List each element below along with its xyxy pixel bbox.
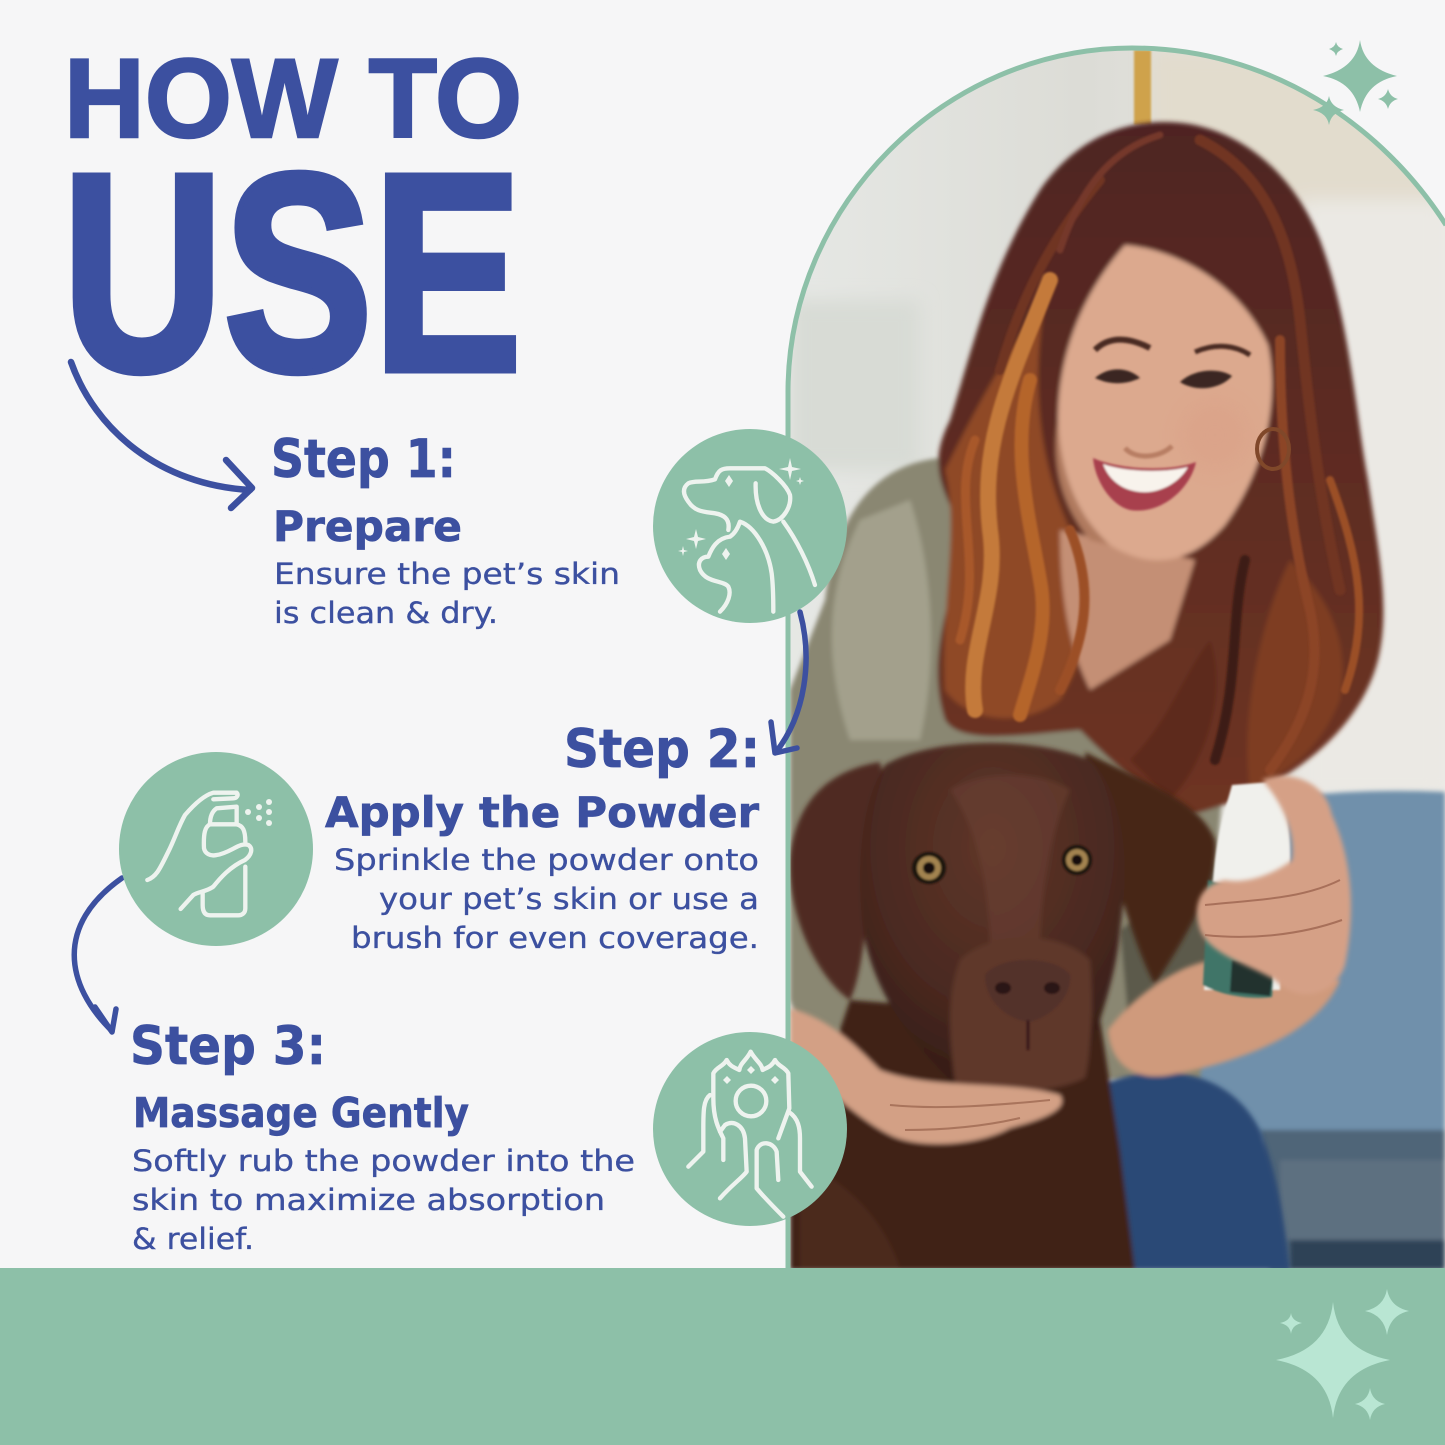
step 2 text: brush for even coverage.	[351, 921, 759, 955]
bottom band	[0, 1268, 1445, 1445]
arrow: step 1 to step 2	[771, 612, 806, 753]
arch outline	[788, 48, 1445, 1268]
earring	[1257, 429, 1289, 469]
lower hand	[790, 1008, 1062, 1144]
step 1 text: Prepare	[273, 502, 462, 551]
step 3 text: Massage Gently	[133, 1089, 469, 1137]
dog eyes and nose	[912, 845, 1092, 1050]
step 2 text	[325, 719, 760, 955]
icon: spray bottle in hand	[119, 752, 313, 946]
shirt	[790, 458, 1235, 1080]
sparkles: bottom right	[1276, 1289, 1409, 1420]
step 2 text: your pet’s skin or use a	[379, 882, 759, 916]
holding hand	[1197, 776, 1351, 994]
step 1 text: Step 1:	[271, 429, 456, 490]
sofa	[1190, 791, 1445, 1270]
facial features	[1093, 340, 1250, 511]
step 2 text: Sprinkle the powder onto	[334, 843, 759, 877]
face	[1058, 245, 1272, 560]
photo: woman with chocolate labrador holding a bottle	[785, 45, 1445, 1270]
hand finger lines	[890, 1100, 1050, 1130]
arrow: title to step 1	[71, 362, 252, 508]
step 3 text: Step 3:	[130, 1016, 326, 1077]
hair strands	[960, 135, 1359, 770]
hair back	[938, 122, 1383, 815]
step 3 text: Softly rub the powder into the	[132, 1144, 635, 1178]
icon: hands massaging paw	[653, 1032, 847, 1226]
arrow: step 2 to step 3	[74, 878, 122, 1032]
title: USE	[62, 115, 522, 430]
dog ears	[790, 762, 885, 1000]
step 3 text: skin to maximize absorption	[132, 1183, 605, 1217]
step 2 text: Step 2:	[564, 719, 760, 780]
sparkles: top right	[1313, 40, 1398, 125]
step 1 text: is clean & dry.	[274, 596, 498, 630]
step 2 text: Apply the Powder	[325, 788, 759, 837]
step 3 text: & relief.	[132, 1222, 254, 1256]
arm	[1108, 960, 1340, 1076]
jeans	[1100, 1072, 1290, 1270]
step 3 text	[130, 1016, 635, 1256]
icon: dog and cat	[653, 429, 847, 623]
neck	[1060, 530, 1195, 690]
bottle	[1203, 782, 1290, 998]
cheek glow	[1180, 400, 1250, 470]
dog body	[790, 1000, 1135, 1270]
step 1 text	[271, 429, 620, 630]
dog head	[860, 743, 1125, 1092]
title	[62, 36, 522, 430]
step 1 text: Ensure the pet’s skin	[274, 557, 620, 591]
title: HOW TO	[64, 36, 522, 161]
